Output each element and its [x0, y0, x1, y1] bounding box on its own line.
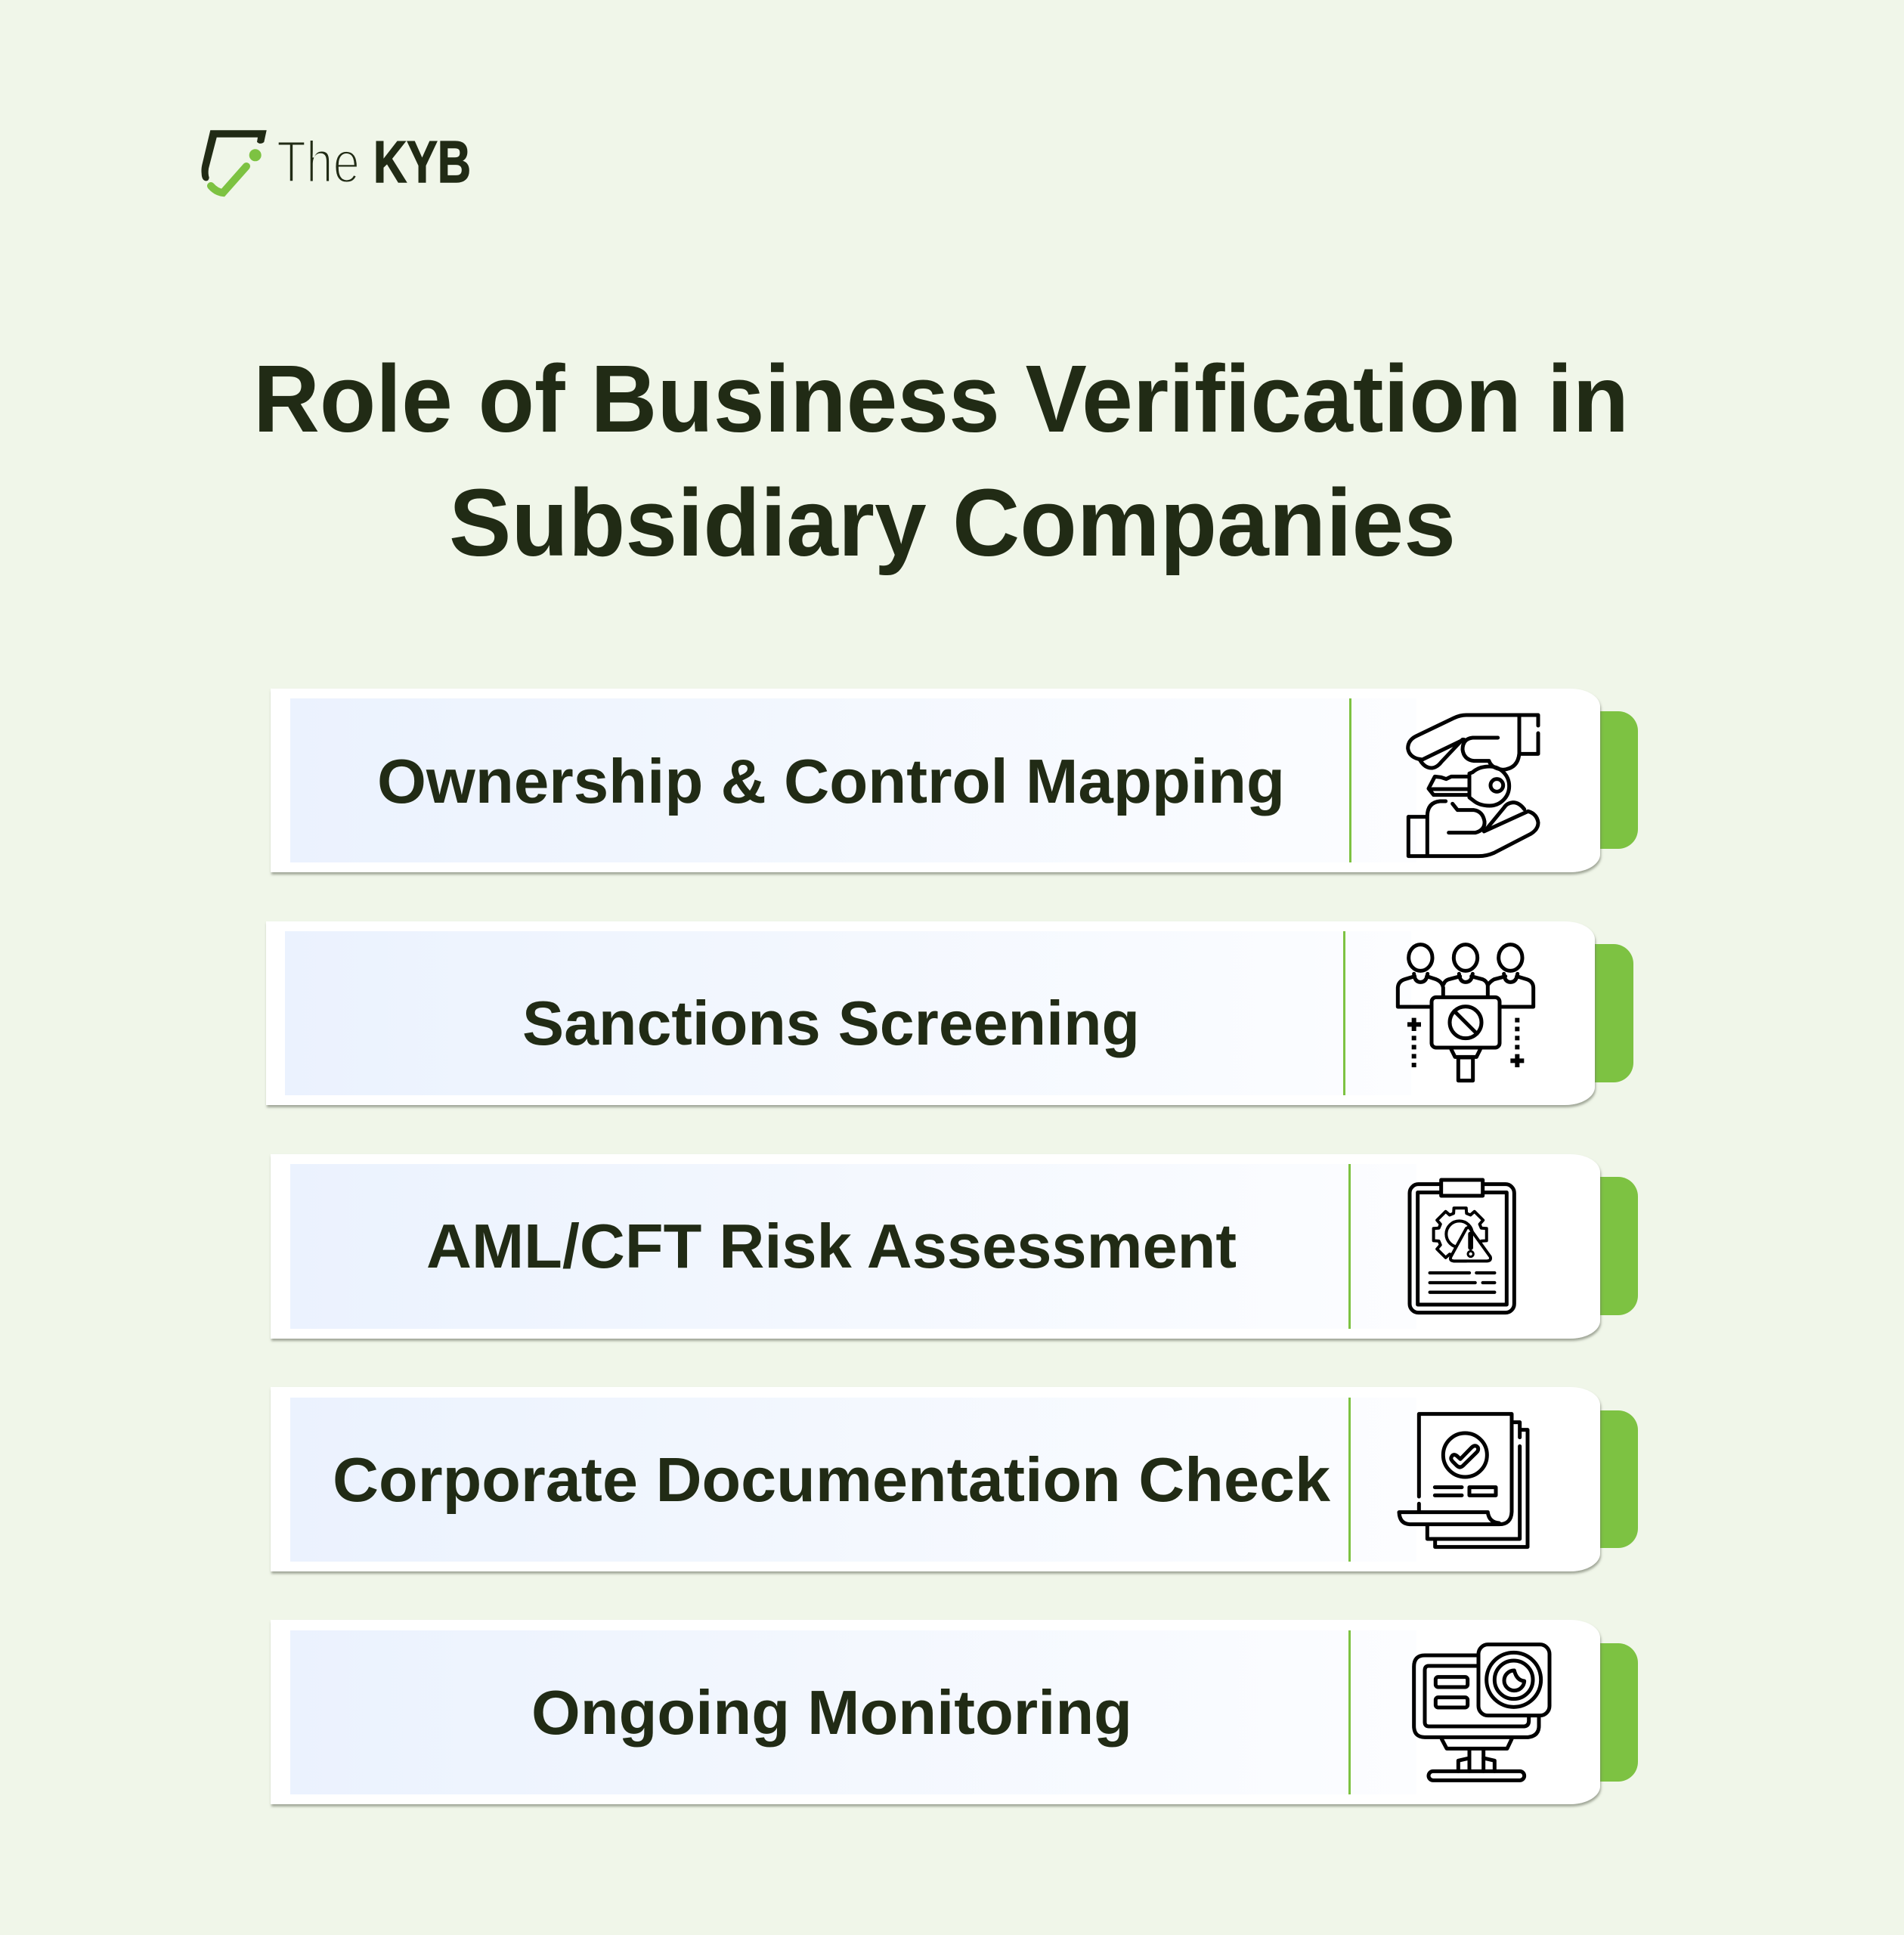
card: [271, 1620, 1600, 1804]
title: [253, 345, 1629, 576]
card: [271, 1154, 1600, 1339]
icon: documents with check: [1399, 1414, 1528, 1547]
title line 2: Subsidiary Companies: [449, 469, 1456, 576]
green tab: [1580, 711, 1638, 849]
card inner gradient: [290, 1398, 1416, 1562]
divider: [1348, 1164, 1351, 1329]
title line 1: Role of Business Verification in: [253, 345, 1629, 452]
panel: Corporate Documentation Check: [271, 1387, 1638, 1571]
panel: Sanctions Screening: [266, 921, 1633, 1105]
panel: Ongoing Monitoring: [271, 1620, 1638, 1804]
logo word: The: The: [277, 128, 360, 195]
label: AML/CFT Risk Assessment: [426, 1211, 1237, 1281]
logo: [201, 128, 471, 195]
icon: action camera: [1414, 1645, 1550, 1780]
card inner gradient: [290, 1630, 1416, 1794]
divider: [1348, 1398, 1351, 1562]
green tab: [1580, 1410, 1638, 1548]
divider: [1343, 931, 1345, 1095]
divider: [1349, 698, 1351, 862]
card: [271, 689, 1600, 872]
green tab: [1580, 1177, 1638, 1315]
label: Ownership & Control Mapping: [377, 746, 1285, 816]
card: [266, 921, 1595, 1105]
logo mark: check: [211, 166, 246, 193]
logo mark: dot: [249, 149, 262, 161]
logo word: KYB: KYB: [373, 128, 471, 195]
card inner gradient: [290, 698, 1416, 862]
divider: [1348, 1630, 1351, 1794]
card inner gradient: [285, 931, 1411, 1095]
green tab: [1575, 944, 1633, 1082]
label: Corporate Documentation Check: [333, 1444, 1331, 1515]
label: Ongoing Monitoring: [531, 1677, 1132, 1748]
icon: clipboard with gear and warning: [1410, 1180, 1514, 1313]
label: Sanctions Screening: [522, 988, 1140, 1058]
icon: hands and key: [1408, 715, 1538, 856]
icon: group with prohibited sign: [1398, 945, 1534, 1081]
card inner gradient: [290, 1164, 1416, 1329]
panel: AML/CFT Risk Assessment: [271, 1154, 1638, 1339]
card: [271, 1387, 1600, 1571]
logo mark: shield: [201, 130, 267, 181]
panel: Ownership & Control Mapping: [271, 689, 1638, 872]
green tab: [1580, 1643, 1638, 1782]
